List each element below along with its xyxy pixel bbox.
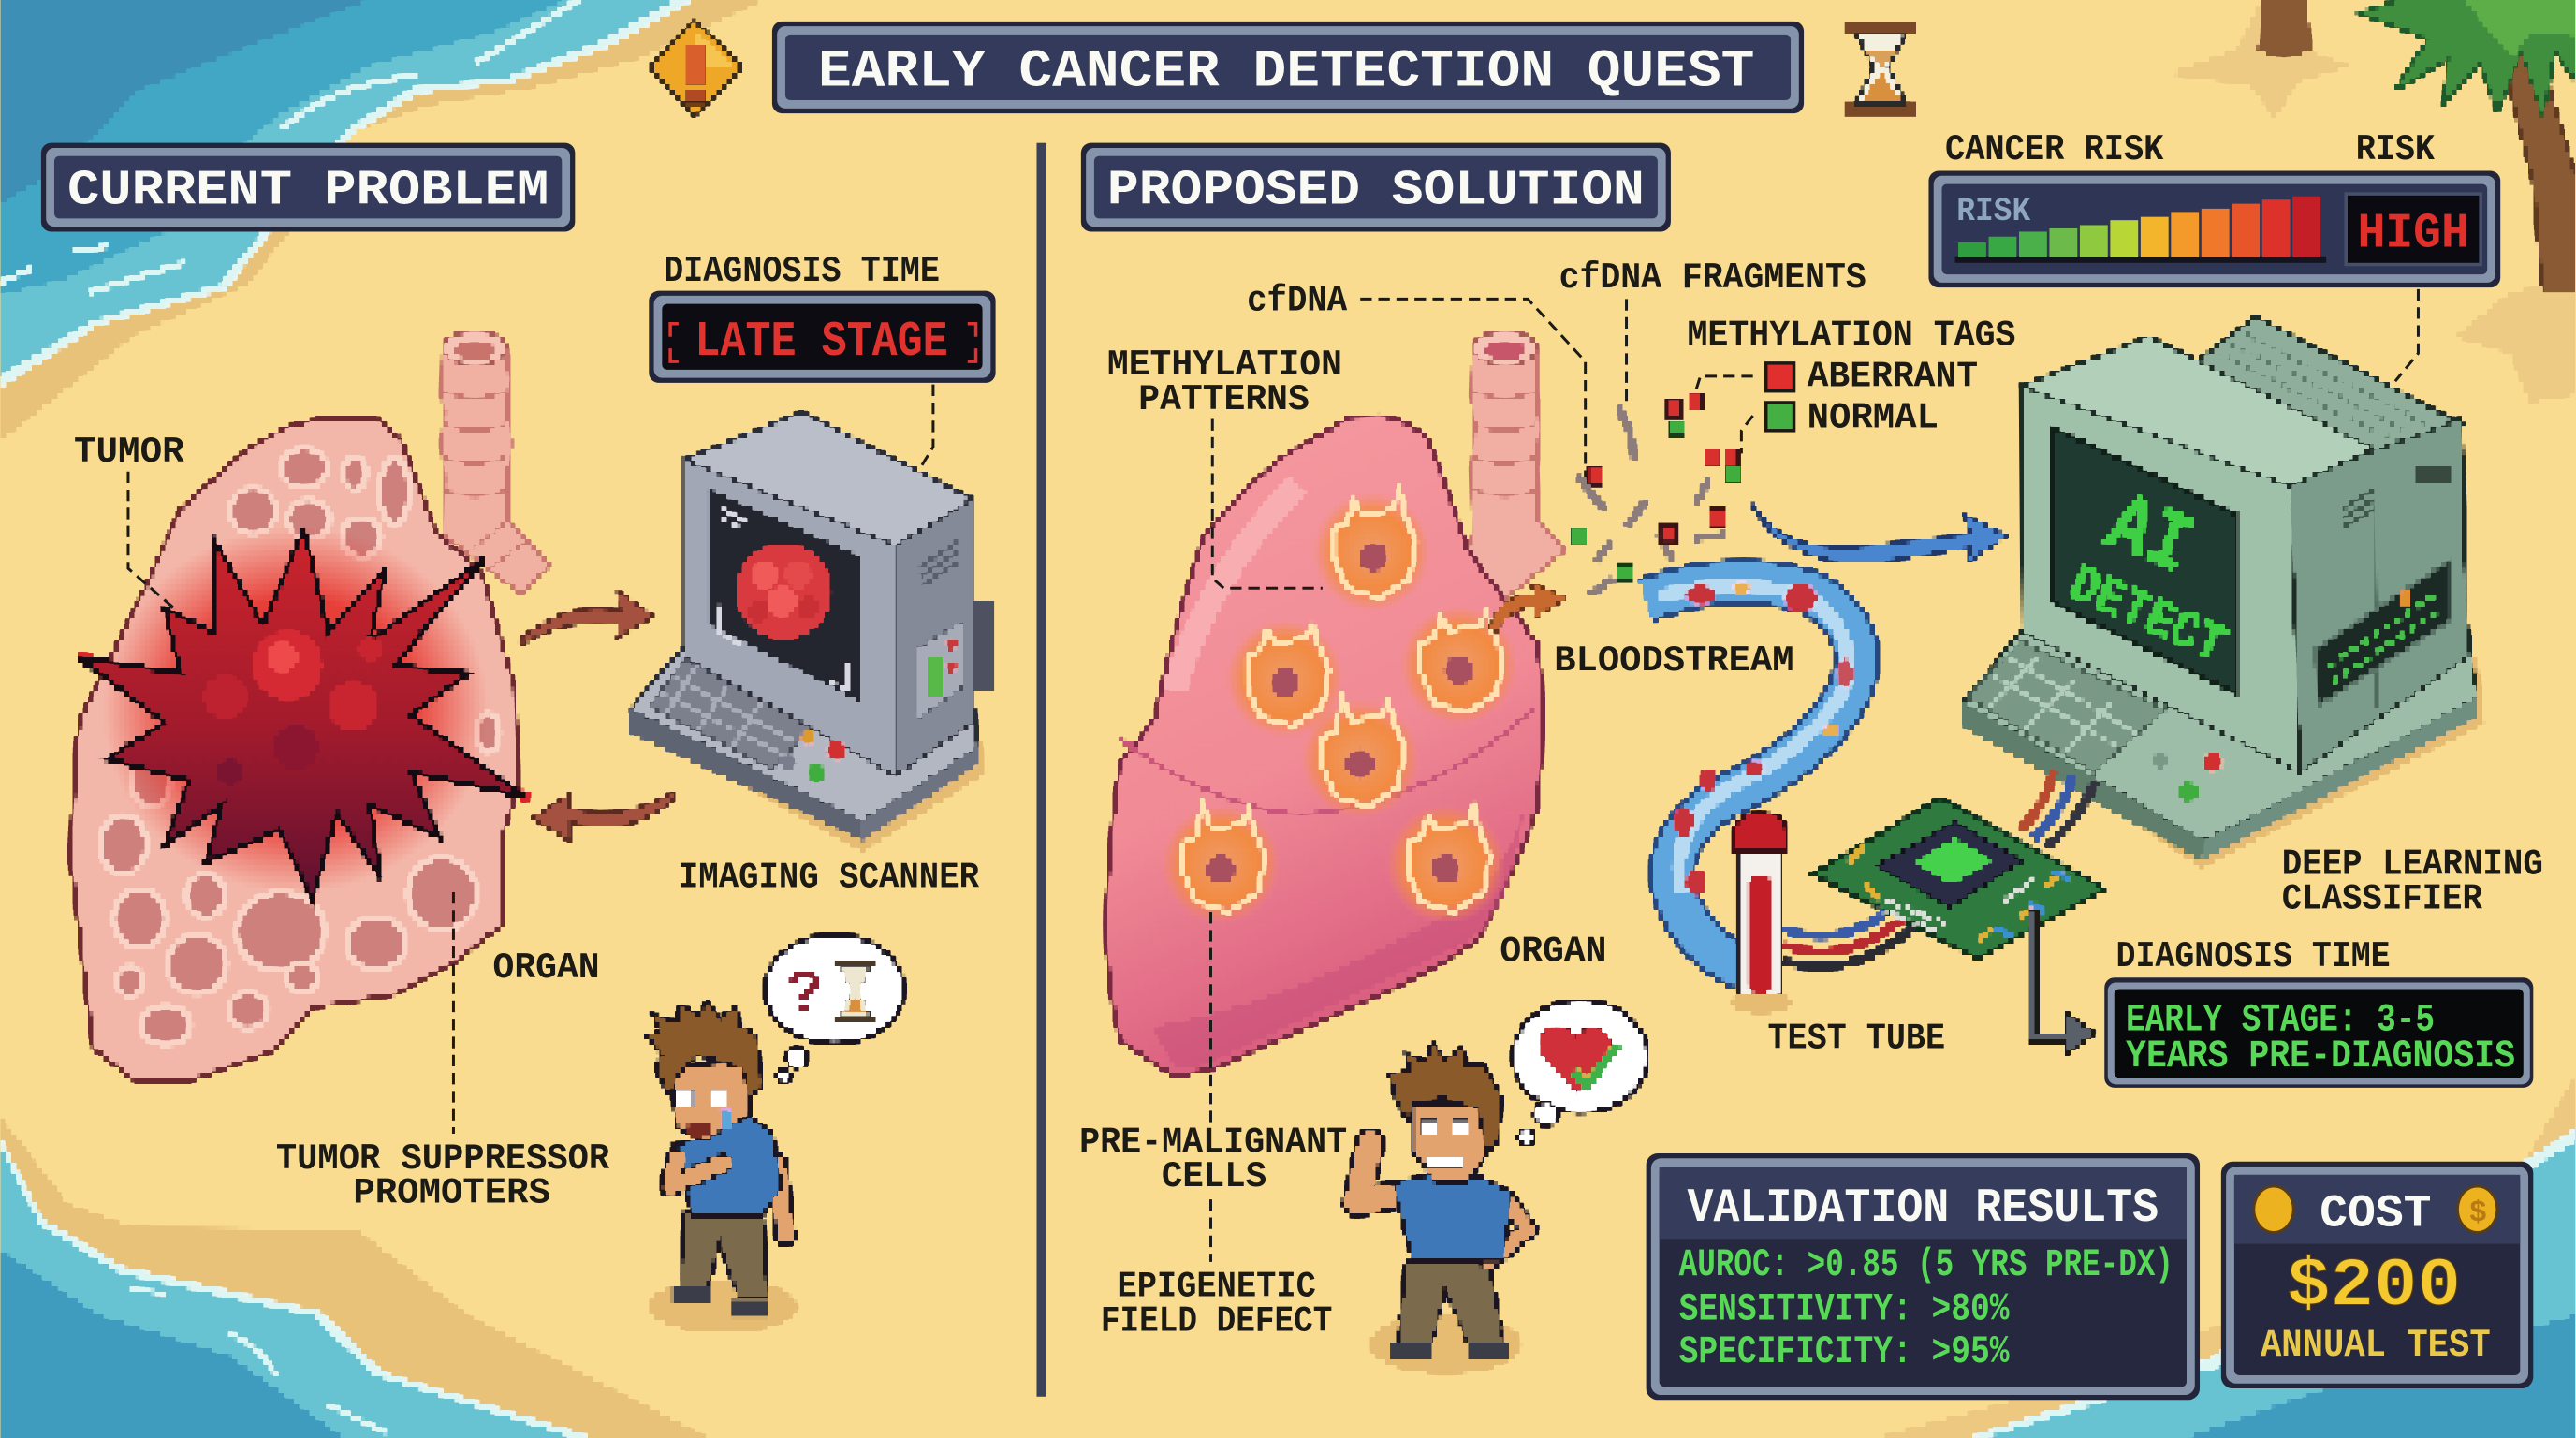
panel: cost: $200 xyxy=(2287,1248,2461,1326)
arrow: organ to scanner xyxy=(520,592,652,644)
label: pre-malignant cells: CELLS xyxy=(1162,1156,1266,1197)
icon: hourglass xyxy=(1847,22,1915,115)
computer keyboard xyxy=(1969,640,2165,772)
thought bubble: worry xyxy=(766,935,903,1083)
background: top-left ocean xyxy=(0,0,762,440)
panel: validation results: SPECIFICITY: >95% xyxy=(1679,1329,2010,1374)
organ outline xyxy=(71,418,518,1081)
scanner right side xyxy=(896,500,973,775)
right trachea xyxy=(1460,332,1564,600)
label: deep learning classifier: DEEP LEARNING xyxy=(2282,844,2543,886)
keyboard xyxy=(649,661,822,769)
icon: warning diamond xyxy=(651,22,742,115)
section heading: proposed solution: PROPOSED SOLUTION xyxy=(1107,163,1645,219)
wires: chip to computer xyxy=(2021,772,2095,846)
section heading: proposed solution xyxy=(1081,143,1671,231)
label: tumor xyxy=(74,432,184,611)
computer right side xyxy=(2291,419,2467,772)
LED readout xyxy=(2315,559,2452,707)
risk meter panel: HIGH xyxy=(2358,205,2469,261)
cell cluster 1 xyxy=(1312,490,1431,611)
thought bubble: healthy xyxy=(1513,1001,1647,1144)
label: test tube: TEST TUBE xyxy=(1767,1019,1945,1060)
status panel: early stage xyxy=(2104,977,2533,1088)
thought bubble: worry: ? xyxy=(787,961,823,1032)
legend: methylation tags: NORMAL xyxy=(1808,397,1939,438)
status panel: early stage: EARLY STAGE: 3-5 xyxy=(2126,997,2435,1042)
computer base xyxy=(1963,608,2478,842)
panel: cost: ANNUAL TEST xyxy=(2261,1323,2491,1368)
test tube xyxy=(1732,814,1791,1014)
AI detect computer: AI xyxy=(2093,477,2205,597)
label: pre-malignant cells xyxy=(1079,912,1347,1197)
tumor xyxy=(79,529,526,901)
icon: coin left xyxy=(2254,1186,2293,1232)
AI detect computer xyxy=(1963,317,2484,868)
label: imaging scanner: IMAGING SCANNER xyxy=(679,858,980,899)
label: methylation patterns xyxy=(1107,345,1342,588)
panel: cost xyxy=(2221,1162,2533,1388)
scanner base xyxy=(631,649,977,822)
cell cluster 3 xyxy=(1399,607,1518,725)
risk meter panel: RISK xyxy=(1956,193,2031,230)
section heading: current problem: CURRENT PROBLEM xyxy=(67,163,549,219)
left trachea xyxy=(442,332,550,594)
AI detect computer: DETECT xyxy=(2060,554,2234,676)
legend: methylation tags: ABERRANT xyxy=(1808,356,1978,397)
panel: cost: COST xyxy=(2320,1187,2431,1240)
risk labels xyxy=(1945,129,2436,170)
cell cluster 6 xyxy=(1386,805,1505,923)
label: tumor: TUMOR xyxy=(74,432,184,473)
label: diagnosis time (left): DIAGNOSIS TIME xyxy=(664,251,940,292)
label: cfDNA fragments: cfDNA FRAGMENTS xyxy=(1559,257,1866,299)
right organ with pre-malignant cells xyxy=(1106,416,1542,1077)
alveoli xyxy=(100,448,500,1045)
computer front xyxy=(2022,386,2300,772)
label: organ (right): ORGAN xyxy=(1500,932,1606,973)
connector: late stage to scanner xyxy=(920,385,933,468)
computer rear vent xyxy=(2193,317,2461,468)
connector: risk panel to computer xyxy=(2395,289,2418,381)
label: epigenetic field defect: EPIGENETIC xyxy=(1117,1267,1316,1308)
arrow: fragments to AI classifier xyxy=(1751,503,2006,563)
bloodstream xyxy=(1647,581,1856,969)
panel: validation results: AUROC: >0.85 (5 YRS PRE-DX) xyxy=(1679,1242,2174,1287)
console buttons xyxy=(827,741,846,761)
risk labels: RISK xyxy=(2356,129,2436,170)
circuit board with AI chip xyxy=(1814,799,2104,958)
status panel: early stage: YEARS PRE-DIAGNOSIS xyxy=(2126,1034,2515,1078)
background: bottom-right ocean xyxy=(1876,1077,2576,1438)
label: methylation patterns: PATTERNS xyxy=(1138,379,1310,420)
label: cfDNA: cfDNA xyxy=(1247,281,1348,322)
label: deep learning classifier xyxy=(2282,844,2543,920)
risk meter panel xyxy=(1928,171,2500,287)
label: organ (left): ORGAN xyxy=(493,947,600,989)
palm trees xyxy=(2169,0,2576,403)
scanner top xyxy=(685,413,973,546)
legend: methylation tags: METHYLATION TAGS xyxy=(1687,315,2015,357)
label: methylation patterns: METHYLATION xyxy=(1107,345,1342,386)
icon: coin right xyxy=(2458,1186,2497,1232)
section divider xyxy=(1036,143,1046,1397)
panel: validation results: SENSITIVITY: >80% xyxy=(1679,1286,2010,1331)
label: deep learning classifier: CLASSIFIER xyxy=(2282,879,2483,920)
console buttons xyxy=(2203,753,2223,772)
computer top xyxy=(2022,337,2374,486)
title text: EARLY CANCER DETECTION QUEST xyxy=(818,41,1754,101)
tumor scan on screen xyxy=(736,544,831,639)
label: diagnosis time (right): DIAGNOSIS TIME xyxy=(2116,936,2391,977)
label: epigenetic field defect: FIELD DEFECT xyxy=(1101,1301,1332,1343)
title banner xyxy=(772,22,1804,113)
wires: test tube to chip xyxy=(1784,901,1925,966)
cell cluster 2 xyxy=(1225,620,1344,738)
character: worried patient xyxy=(646,1003,797,1332)
status panel: late stage: LATE STAGE xyxy=(695,314,948,370)
cell cluster 4 xyxy=(1301,698,1419,818)
section heading: current problem xyxy=(41,143,575,231)
arrow: cfDNA shed from organ xyxy=(1490,583,1566,631)
panel: validation results: VALIDATION RESULTS xyxy=(1687,1182,2159,1236)
label: tumor suppressor promoters: TUMOR SUPPRESSOR xyxy=(276,1138,610,1180)
label: epigenetic field defect xyxy=(1101,1199,1332,1343)
arrow: classifier to early diagnosis xyxy=(2029,912,2095,1053)
AI screen xyxy=(2052,427,2236,694)
risk labels: CANCER RISK xyxy=(1945,129,2164,170)
side controls xyxy=(916,621,963,720)
risk bars xyxy=(1958,197,2320,257)
label: bloodstream: BLOODSTREAM xyxy=(1554,640,1794,682)
label: tumor suppressor promoters: PROMOTERS xyxy=(353,1173,550,1214)
panel: validation results xyxy=(1647,1153,2200,1400)
scanner front xyxy=(685,460,896,775)
status panel: late stage xyxy=(649,291,996,383)
left organ with tumor xyxy=(71,418,529,1081)
legend: methylation tags xyxy=(1687,315,2015,453)
background: bottom-left ocean xyxy=(0,1117,708,1438)
inflamed area xyxy=(102,526,490,894)
label: cfDNA xyxy=(1247,281,1586,477)
imaging scanner xyxy=(631,413,992,851)
label: pre-malignant cells: PRE-MALIGNANT xyxy=(1079,1122,1347,1163)
character: confident patient xyxy=(1357,1043,1528,1373)
scanner screen xyxy=(708,488,859,701)
cfDNA fragments cluster xyxy=(1573,394,1740,594)
arrow: scanner to organ xyxy=(534,794,675,842)
label: tumor suppressor promoters xyxy=(276,892,610,1214)
cell cluster 5 xyxy=(1162,805,1280,923)
icon: coin right: $ xyxy=(2469,1197,2487,1230)
